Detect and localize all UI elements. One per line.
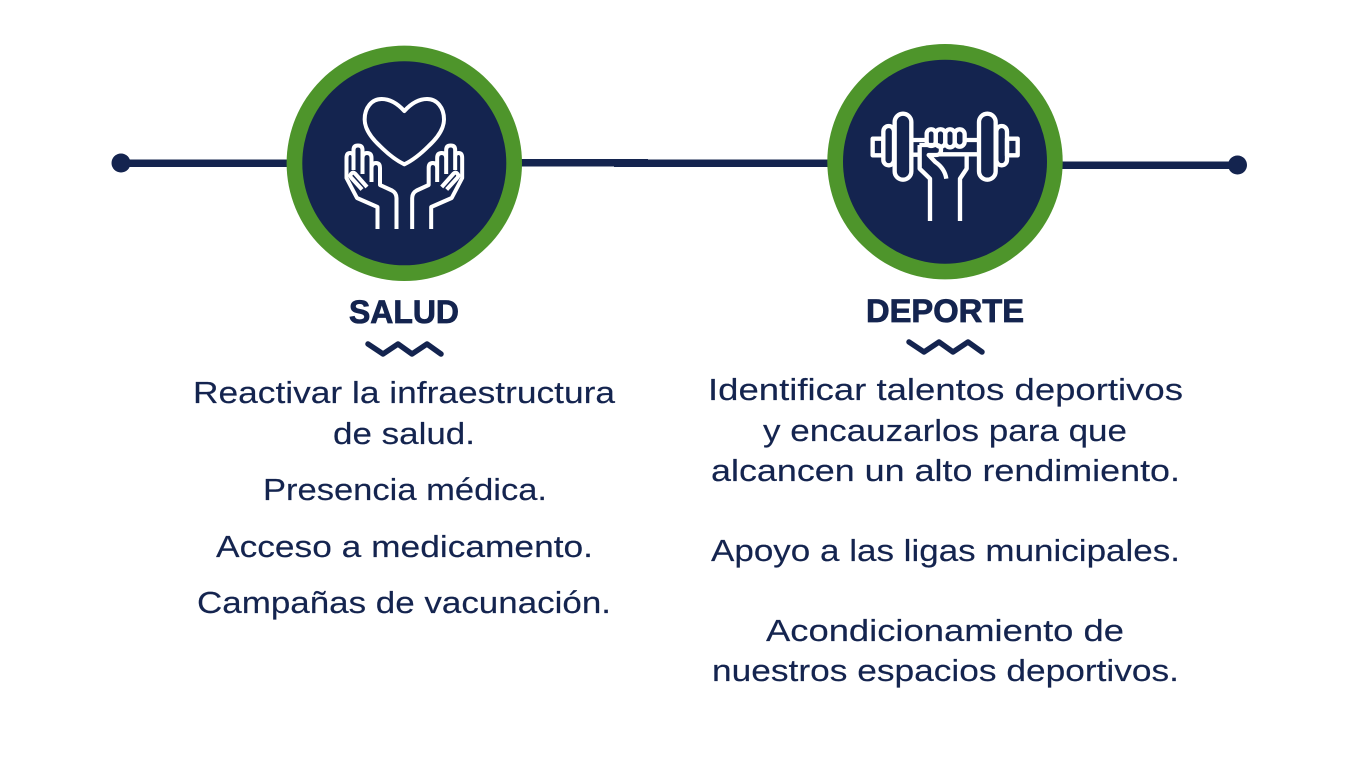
wave divider (368, 344, 441, 354)
text: espacios deportivos (712, 613, 1179, 688)
text: espacios deportivos: Acondicionamiento de (766, 613, 1124, 648)
icon: fist lifting dumbbell (827, 44, 1063, 279)
text: talentos deportivos: alcancen un alto rendimiento. (711, 453, 1180, 488)
text: infraestructura (193, 375, 616, 451)
text: talentos deportivos: Identificar talentos deportivos (708, 372, 1183, 407)
panel: salud (193, 46, 616, 620)
text: ligas municipales: Apoyo a las ligas municipales. (711, 533, 1180, 568)
timeline connector (112, 154, 1247, 174)
icon: hands holding heart (287, 46, 522, 281)
panel: deporte (708, 44, 1183, 688)
text: acceso a medicamento: Acceso a medicamento. (216, 529, 593, 564)
text: presencia medica: Presencia médica. (263, 472, 547, 507)
wave divider (909, 342, 982, 352)
heading: salud: SALUD (349, 294, 459, 330)
text: talentos deportivos (708, 372, 1183, 488)
text: espacios deportivos: nuestros espacios deportivos. (712, 653, 1179, 688)
heading: deporte: DEPORTE (866, 293, 1024, 329)
text: talentos deportivos: y encauzarlos para que (763, 413, 1127, 448)
text: campanas de vacunacion: Campañas de vacunación. (197, 585, 611, 620)
text: infraestructura: de salud. (333, 416, 475, 451)
text: infraestructura: Reactivar la infraestructura (193, 375, 616, 410)
